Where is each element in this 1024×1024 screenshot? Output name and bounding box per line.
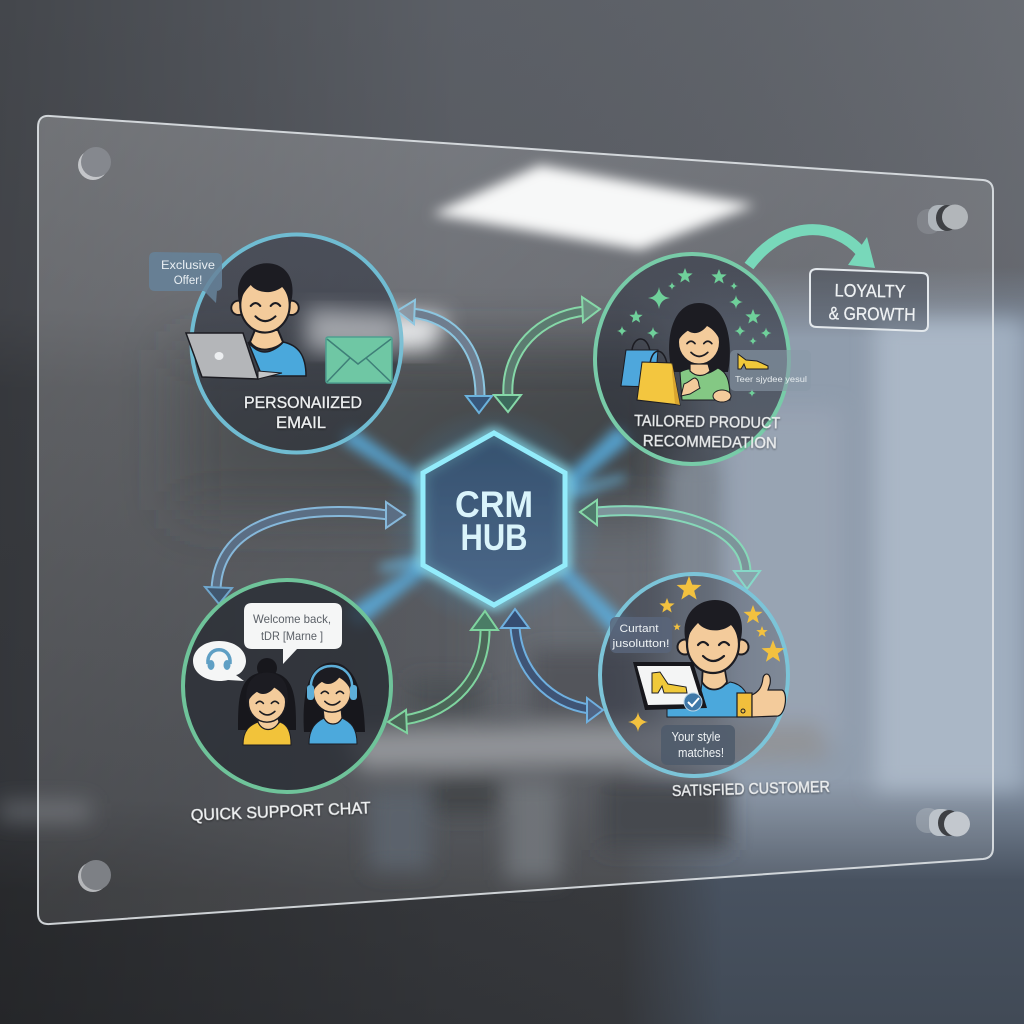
callout: your style matches [661,725,735,765]
label: personalized email: EMAIL [276,414,326,432]
mounting standoff: top right [917,204,968,234]
panel: quick support chat [183,580,391,792]
arrow: email to hub [397,300,492,413]
icon: smiling customer [678,600,748,673]
label: tailored product recommendation [634,413,780,452]
callout: current solution: Curtant [620,623,658,635]
callout: your style matches: Your style [672,729,720,744]
label: satisfied customer: SATISFIED CUSTOMER [672,779,830,800]
icon: thumbs up [737,674,785,717]
icon: envelope [326,337,392,383]
arrow: support chat to hub [388,611,498,733]
hub title [455,484,533,558]
loyalty box: & GROWTH [828,303,916,325]
callout: exclusive offer [149,252,222,303]
icon: neck [690,364,710,376]
loyalty box: LOYALTY [834,280,906,302]
glass panel [38,116,993,924]
label: quick support chat: QUICK SUPPORT CHAT [190,798,371,825]
callout: shoe card: Teer sjydee yesul [735,374,807,384]
icon: neck [702,665,727,690]
icon: neck [250,330,283,350]
hub title: CRM [455,484,533,525]
icon: shirt [248,342,306,376]
icon: green top [680,368,730,400]
icon: hands [681,378,731,402]
panel: tailored recommendation [595,254,811,464]
icon: tablet with shoe [633,662,707,711]
icon: smiling man [231,263,299,333]
loyalty box [810,269,928,331]
icon: laptop [186,333,282,379]
gold stars [628,576,784,732]
label: tailored product recommendation: RECOMMEDATION [643,433,777,452]
label: personalized email [244,394,362,432]
icon: agent with headset [304,662,365,744]
callout: current solution: jusolutton! [611,638,670,650]
callout: welcome back [244,603,342,664]
icon: woman with bun [238,658,296,745]
arrow: hub to support chat [205,502,405,604]
callout: shoe card [730,350,811,391]
arrow: recommendation to loyalty [749,230,875,268]
icon: yellow shopping bag [637,351,680,405]
callout: your style matches: matches! [678,745,724,760]
callout: headset icon [193,641,246,681]
hexagon: CRM hub [423,433,565,605]
central light rays [340,425,632,640]
panel: satisfied customer [600,574,788,776]
icon: smiling woman [676,309,722,364]
light reflection [310,312,398,350]
callout: welcome back: Welcome back, [253,612,331,626]
arrow: satisfied customer to hub (upper) [580,500,760,589]
callout: current solution [610,617,672,653]
hub title: HUB [460,517,528,558]
mounting standoff: bottom right [916,808,970,836]
label: tailored product recommendation: TAILORED PRODUCT [634,413,780,432]
arrow: hub to satisfied customer (lower) [501,609,603,722]
icon: hair behind [669,303,730,372]
icon: blue shopping bag [621,339,658,387]
mounting standoff: top left [78,147,111,180]
callout: welcome back: tDR [Marne ] [261,629,323,643]
label: personalized email: PERSONAIIZED [244,394,362,412]
callout: exclusive offer: Exclusive [161,260,215,272]
circular halo [382,407,606,631]
panel: personalized email [149,234,402,452]
mounting standoff: bottom left [78,860,111,892]
callout: exclusive offer: Offer! [174,275,202,287]
icon: blue shirt [667,682,752,717]
sparkle stars [617,268,772,397]
arrow: hub to recommendation [494,297,600,412]
